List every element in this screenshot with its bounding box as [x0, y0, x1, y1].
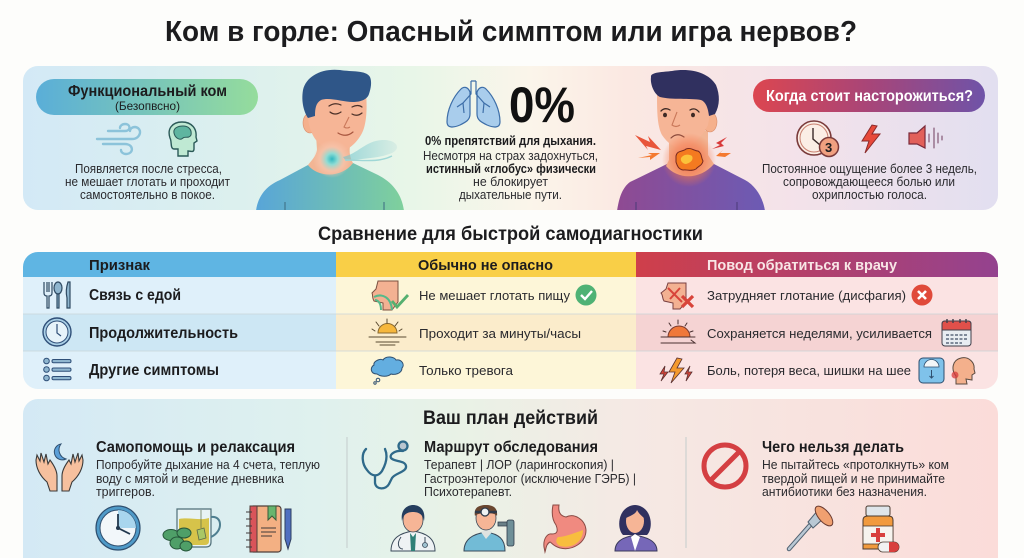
row: food: Не мешает глотать пищу: [419, 288, 570, 303]
panel: action plan: [23, 399, 998, 558]
column: examination route: [363, 439, 657, 552]
icon: clock: [43, 318, 71, 346]
text: central explanation: [423, 134, 598, 202]
icon: check circle: [576, 284, 596, 306]
column: what not to do: Чего нельзя делать: [762, 439, 904, 456]
icon: hands and moon: [36, 444, 83, 491]
icon: cross circle: [912, 284, 932, 306]
column: self-help: [36, 439, 320, 552]
row: duration: Сохраняется неделями, усиливается: [707, 326, 932, 341]
icon: scale: [919, 358, 944, 383]
icon: stethoscope: [363, 442, 408, 488]
icon: psychotherapist: [615, 505, 657, 551]
text: warning description: охриплостью голоса.: [812, 187, 927, 202]
text: warning description: [762, 161, 977, 202]
row: duration: Продолжительность: [89, 325, 238, 342]
table header: [89, 257, 898, 274]
icon: wind: [97, 124, 140, 154]
icon: mint tea: [163, 509, 220, 551]
text: self-help body: [96, 457, 320, 499]
icon: red sun: [661, 320, 695, 343]
pill: functional lump: Функциональный ком: [68, 83, 227, 100]
text: self-help body: воду с мятой и ведение дневника: [96, 471, 285, 486]
icon: therapist: [391, 505, 435, 551]
icon: lungs: [447, 81, 500, 127]
pill: warning heading: [753, 79, 985, 112]
row: duration: Проходит за минуты/часы: [419, 326, 581, 341]
text: central explanation: не блокирует: [473, 174, 548, 189]
text: functional description: Появляется после стресса,: [75, 161, 222, 176]
icon: pill bottle: [863, 506, 899, 552]
text: central explanation: истинный «глобус» физически: [426, 161, 596, 176]
text: prohibitions body: Не пытайтесь «протолкнуть» ком: [762, 457, 949, 472]
text: route body: Психотерапевт.: [424, 484, 512, 499]
stat: zero percent: [447, 77, 575, 133]
text: route body: [424, 457, 636, 499]
table header: Обычно не опасно: [418, 257, 553, 274]
text: prohibitions body: антибиотики без назначения.: [762, 484, 927, 499]
column: what not to do: [704, 439, 949, 552]
illustration: worried man: [617, 70, 765, 211]
icon: clock three weeks: [797, 121, 838, 156]
stat: zero percent: 0%: [509, 77, 575, 133]
heading: action plan: Ваш план действий: [423, 408, 598, 429]
icon: neck lump head: [952, 358, 975, 384]
text: functional description: самостоятельно в покое.: [80, 187, 215, 202]
row: duration: [43, 318, 971, 346]
pill: functional lump: [36, 79, 258, 115]
text: self-help body: Попробуйте дыхание на 4 счета, теплую: [96, 457, 320, 472]
icon: notebook and pen: [246, 506, 291, 552]
icon: lightning: [862, 125, 880, 153]
text: central explanation: Несмотря на страх задохнуться,: [423, 148, 598, 163]
text: route body: Терапевт | ЛОР (ларингоскопия) |: [424, 457, 614, 472]
text: warning description: Постоянное ощущение более 3 недель,: [762, 161, 977, 176]
row: food: Затрудняет глотание (дисфагия): [707, 288, 906, 303]
icon: head with brain: [169, 122, 197, 156]
column: self-help: Самопомощь и релаксация: [96, 439, 295, 456]
pill: functional lump: (Безопвсно): [115, 99, 180, 113]
icon: ENT doctor: [464, 505, 514, 551]
icon: blocked throat: [661, 283, 693, 309]
row: other symptoms: Боль, потеря веса, шишки на шее: [707, 363, 911, 378]
panel: top comparison: [23, 66, 998, 211]
icon: calendar: [942, 319, 971, 346]
icon: wall clock: [96, 506, 140, 550]
text: route body: Гастроэнтеролог (исключение ГЭРБ) |: [424, 471, 636, 486]
table: self-diagnosis comparison: [23, 252, 998, 389]
icon: stomach: [544, 505, 586, 552]
heading: comparison table: Сравнение для быстрой самодиагностики: [318, 224, 703, 245]
text: prohibitions body: твердой пищей и не принимайте: [762, 471, 945, 486]
row: other symptoms: [44, 357, 975, 384]
icon: pain bolts: [660, 358, 692, 383]
text: functional description: [65, 161, 230, 202]
icon: sunrise: [369, 319, 406, 345]
text: functional description: не мешает глотать и проходит: [65, 174, 230, 189]
text: central explanation: 0% препятствий для дыхания.: [425, 134, 596, 148]
icon: throat with check: [372, 281, 408, 310]
icon: thought cloud: [371, 357, 403, 384]
icon: hoarse voice speaker: [909, 126, 942, 148]
icon: fork with food: [789, 503, 836, 549]
icon: prohibition sign: [704, 445, 746, 487]
text: self-help body: триггеров.: [96, 484, 155, 499]
row: food: Связь с едой: [89, 287, 181, 304]
row: other symptoms: Другие симптомы: [89, 362, 219, 379]
text: central explanation: дыхательные пути.: [459, 187, 562, 202]
icon: clock three weeks: 3: [825, 140, 832, 155]
column: examination route: Маршрут обследования: [424, 439, 598, 456]
illustration: calm man: [256, 70, 404, 211]
title: Ком в горле: Опасный симптом или игра нервов?: [165, 16, 857, 48]
table header: Признак: [89, 257, 150, 274]
row: food: [44, 281, 932, 310]
row: other symptoms: Только тревога: [419, 363, 514, 378]
pill: warning heading: Когда стоит насторожиться?: [766, 88, 973, 105]
text: warning description: сопровождающееся болью или: [783, 174, 955, 189]
icon: cutlery: [44, 282, 70, 308]
table header: Повод обратиться к врачу: [707, 257, 898, 274]
icon: list: [44, 358, 71, 381]
text: prohibitions body: [762, 457, 949, 499]
